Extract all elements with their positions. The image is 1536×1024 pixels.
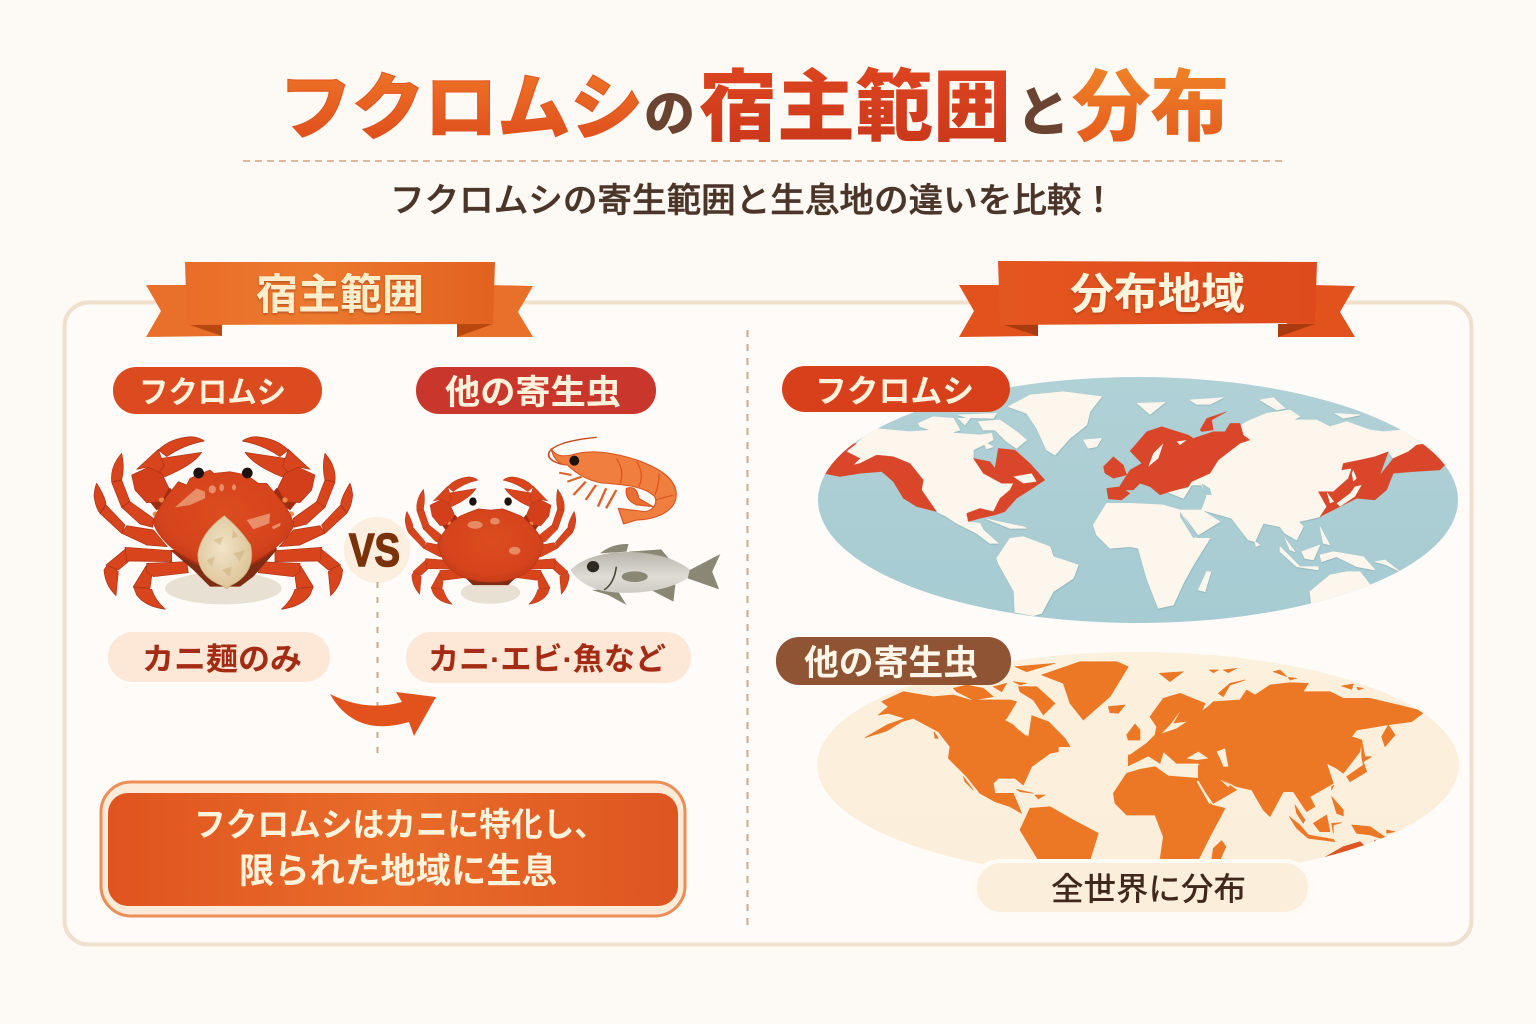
callout line 1: フクロムシはカニに特化し、 (194, 806, 606, 843)
label: カニ・エビ・魚など (406, 632, 691, 683)
cream seas and bays (1162, 709, 1230, 804)
vs text: VS (349, 524, 400, 576)
pill text: フクロムシ (815, 373, 974, 409)
title: の: の (644, 86, 695, 142)
icon: crab with sacculina (94, 437, 353, 609)
icon: shrimp (549, 437, 676, 524)
pill text: 他の寄生虫 (445, 374, 621, 412)
map: 他の寄生虫 distribution (817, 652, 1459, 878)
map land and red range (823, 392, 1447, 616)
label text: 全世界に分布 (1051, 871, 1246, 907)
subtitle: フクロムシの寄生範囲と生息地の違いを比較！ (390, 182, 1116, 220)
pill text: 他の寄生虫 (804, 644, 978, 683)
ribbon label: 宿主範囲: 宿主範囲 (256, 271, 424, 318)
callout (101, 782, 685, 916)
vs badge (344, 517, 410, 583)
orange land, western hemisphere (865, 662, 1140, 860)
map: フクロムシ distribution (818, 377, 1458, 623)
white land, eastern hemisphere (1093, 398, 1428, 608)
icon: fish (571, 544, 720, 605)
label text: カニ麺のみ (142, 642, 302, 677)
title: フクロムシ: フクロムシ (279, 69, 643, 149)
pill: 他の寄生虫 (map) (776, 637, 1011, 685)
pill: フクロムシ (map) (782, 366, 1010, 412)
pill: フクロムシ (host) (113, 367, 322, 414)
white cut-outs in Eurasian range (1148, 440, 1362, 507)
sacculina sac (198, 516, 252, 589)
ribbon label: 分布地域: 分布地域 (1070, 271, 1245, 319)
label: カニ麺のみ (108, 632, 330, 682)
cut-out, Gulf of St Lawrence (1013, 473, 1037, 483)
white land, western hemisphere (847, 392, 1102, 616)
label text: カニ·エビ·魚など (428, 642, 666, 677)
pill: 他の寄生虫 (host) (416, 367, 656, 414)
map land orange (865, 662, 1425, 872)
cream Hudson Bay (1005, 714, 1032, 736)
label: 全世界に分布 (970, 859, 1315, 919)
title: と: と (1016, 83, 1070, 143)
title (279, 63, 1229, 151)
callout line 2: 限られた地域に生息 (239, 852, 557, 891)
arrow (330, 692, 436, 736)
red range, North America (823, 443, 1045, 522)
red range, Eurasia (1103, 412, 1447, 517)
ribbon: 分布地域 (959, 261, 1355, 337)
title: 分布: 分布 (1072, 63, 1229, 151)
ribbon: 宿主範囲 (146, 262, 533, 337)
inland seas (1180, 483, 1212, 538)
orange land, eastern hemisphere (1113, 668, 1425, 872)
main panel (64, 302, 1472, 944)
pill text: フクロムシ (139, 375, 286, 410)
icon: crab host 2 (405, 477, 576, 604)
title: 宿主範囲: 宿主範囲 (699, 63, 1011, 151)
